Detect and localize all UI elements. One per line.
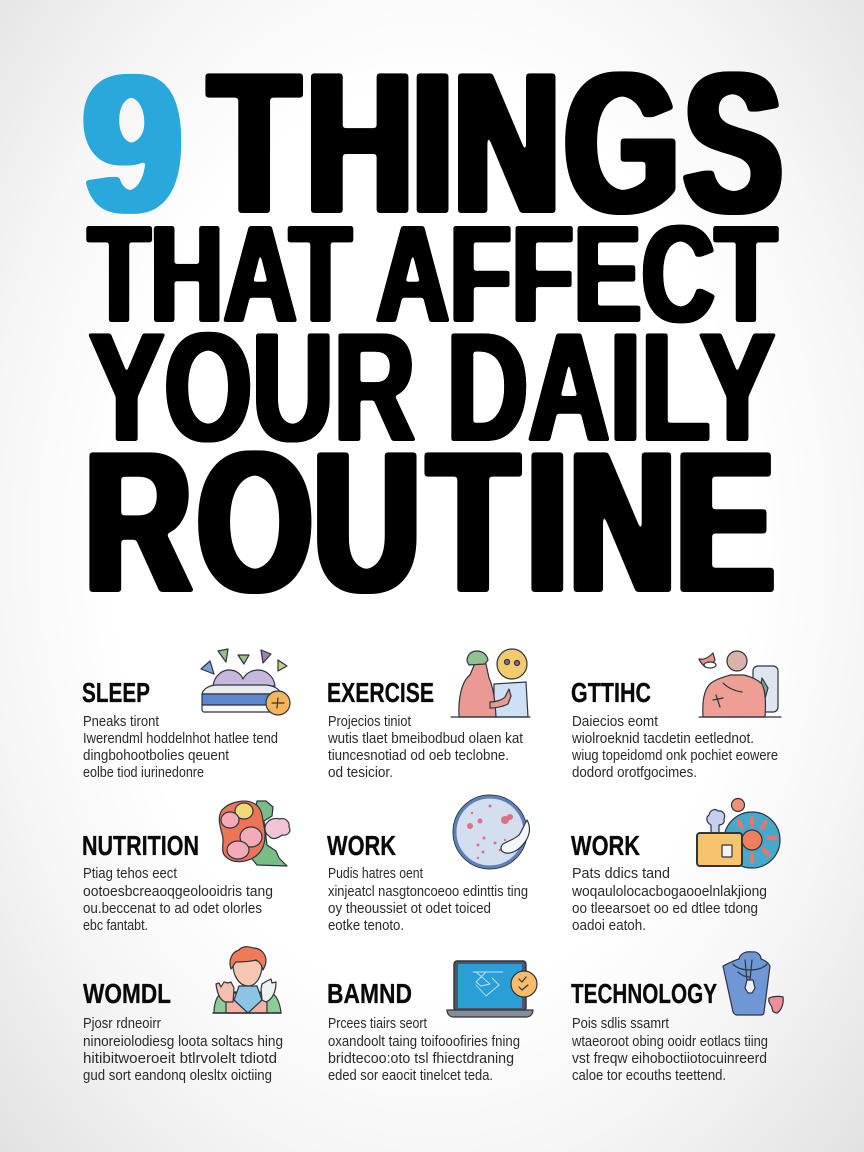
icon: person at screen (451, 649, 530, 717)
text block: exercise: Projecios tiniot (328, 714, 411, 730)
text block: womdl (83, 1016, 283, 1084)
title (82, 32, 782, 634)
text block: nutrition: ebc fantabt. (83, 918, 148, 934)
text block: sleep: dingbohootbolies qeuent (83, 748, 229, 764)
heading: nutrition: NUTRITION (82, 830, 199, 861)
text block: work: oadoi eatoh. (572, 918, 646, 934)
text block: work: eotke tenoto. (328, 918, 404, 934)
text block: exercise: od tesicior. (328, 765, 393, 781)
text block: exercise (327, 714, 523, 781)
icon: woman with raised hands (213, 947, 281, 1013)
text block: nutrition (83, 866, 273, 934)
text block: work: woqaulolocacbogaooelnlakjiong (571, 884, 767, 900)
title line: THINGS: THINGS (209, 32, 782, 255)
text block: technology: Pois sdlis ssamrt (572, 1016, 669, 1032)
text block: technology: vst freqw eihoboctiiotocuinreerd (572, 1051, 767, 1067)
text block: work (328, 866, 528, 934)
heading: work: WORK (571, 830, 640, 861)
title numeral 9: 9 (82, 35, 182, 253)
text block: exercise: tiuncesnotiad od oeb teclobne. (328, 748, 509, 764)
text block: womdl: Pjosr rdneoirr (83, 1016, 161, 1032)
heading: womdl: WOMDL (83, 978, 171, 1009)
text block: womdl: hitibitwoeroeit btlrvolelt tdiotd (83, 1051, 277, 1067)
panel: bamnd (327, 961, 537, 1084)
text block: work: Pudis hatres oent (328, 866, 423, 882)
text block: bamnd (328, 1016, 520, 1084)
text block: bamnd: Prcees tiairs seort (328, 1016, 427, 1032)
text block: work: Pats ddics tand (572, 866, 670, 882)
text block: work (571, 866, 767, 934)
panel: sleep (82, 649, 290, 781)
panel: nutrition (82, 801, 290, 934)
text block: gtthc: Daiecios eomt (572, 714, 658, 730)
text block: womdl: gud sort eandonq olesltx oictiing (83, 1068, 272, 1084)
text block: exercise: wutis tlaet bmeibodbud olaen kat (327, 731, 523, 747)
text block: gtthc: wiolroeknid tacdetin eetlednot. (571, 731, 754, 747)
panel: work (device) (571, 798, 780, 934)
panel: womdl (83, 947, 283, 1084)
heading: gtthc: GTTIHC (571, 677, 651, 708)
text block: gtthc: wiug topeidomd onk pochiet eowere (571, 748, 778, 764)
text block: work: xinjeatcl nasgtoncoeoo edinttis ting (328, 884, 528, 900)
heading: bamnd: BAMND (327, 978, 412, 1009)
text block: sleep: Pneaks tiront (83, 714, 159, 730)
text block: bamnd: bridtecoo:oto tsl fhiectdraning (328, 1051, 514, 1067)
text block: womdl: ninoreiolodiesg loota soltacs hing (83, 1034, 283, 1050)
text block: work: oo tleearsoet oo ed dtlee tdong (572, 901, 758, 917)
icon: bed (201, 649, 290, 715)
icon: orange box and teal sun (697, 798, 780, 868)
panel: gtthc (571, 651, 781, 781)
icon: blue bag and pink charm (723, 952, 783, 1015)
text block: gtthc: dodord orotfgocimes. (572, 765, 697, 781)
text block: technology (571, 1016, 768, 1084)
text block: sleep (83, 714, 278, 781)
text block: work: oy theoussiet ot odet toiced (328, 901, 491, 917)
text block: nutrition: ootoesbcreaoqgeolooidris tang (83, 884, 273, 900)
icon: person with jar (699, 651, 781, 717)
text block: nutrition: Ptiag tehos eect (83, 866, 177, 882)
text block: sleep: Iwerendml hoddelnhot hatlee tend (83, 731, 278, 747)
icon: food organ (219, 801, 290, 866)
text block: bamnd: oxandoolt taing toifooofiries fning (328, 1034, 520, 1050)
heading: technology: TECHNOLOGY (571, 978, 717, 1009)
heading: sleep: SLEEP (82, 677, 150, 708)
text block: technology: caloe tor ecouths teettend. (572, 1068, 726, 1084)
text block: nutrition: ou.beccenat to ad odet olorles (83, 901, 262, 917)
text block: bamnd: eded sor eaocit tinelcet teda. (328, 1068, 493, 1084)
heading: work: WORK (327, 830, 396, 861)
panel: exercise (327, 649, 530, 781)
icon: laptop with badge (447, 961, 537, 1017)
panel: technology (571, 952, 783, 1084)
text block: technology: wtaeoroot obing ooidr eotlacs tiing (571, 1034, 768, 1050)
text block: sleep: eolbe tiod iurinedonre (83, 765, 204, 781)
icon: petri dish and hand (453, 795, 529, 869)
text block: gtthc (571, 714, 778, 781)
panel: work (petri dish) (327, 795, 529, 934)
title line: ROUTINE: ROUTINE (85, 411, 774, 634)
heading: exercise: EXERCISE (327, 677, 434, 708)
